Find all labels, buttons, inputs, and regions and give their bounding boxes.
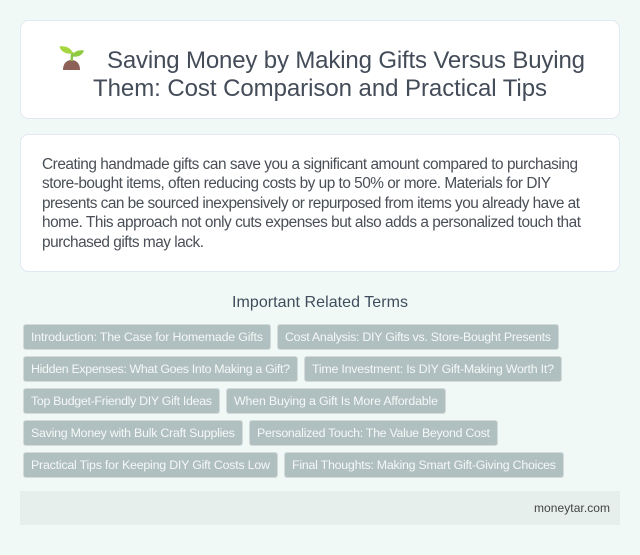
heading: title: Saving Money by Making Gifts Versus Buying	[107, 47, 585, 74]
tag: introduction: Introduction: The Case for Homemade Gifts	[31, 330, 263, 344]
tag: introduction	[24, 324, 270, 350]
tag: time investment: Time Investment: Is DIY Gift-Making Worth It?	[312, 362, 554, 376]
heading: title	[93, 47, 585, 102]
tag: final thoughts: Final Thoughts: Making Smart Gift-Giving Choices	[292, 458, 556, 472]
tag: top ideas: Top Budget-Friendly DIY Gift Ideas	[31, 394, 212, 408]
tag: personalized touch	[250, 420, 498, 446]
footer bar	[20, 491, 620, 525]
tag: final thoughts	[284, 452, 564, 478]
tag: practical tips	[24, 452, 278, 478]
text block: summary	[42, 156, 582, 251]
text block: summary: purchased gifts may lack.	[42, 234, 204, 251]
tag: cost analysis: Cost Analysis: DIY Gifts vs. Store-Bought Presents	[285, 330, 551, 344]
tag: when buying: When Buying a Gift Is More Affordable	[234, 394, 438, 408]
panel: title card	[20, 20, 620, 118]
tag: bulk supplies	[24, 420, 242, 446]
tag list	[24, 324, 564, 478]
tag: when buying	[226, 388, 446, 414]
tag: personalized touch: Personalized Touch: The Value Beyond Cost	[257, 426, 491, 440]
heading: important related terms: Important Related Terms	[232, 294, 408, 311]
tag: top ideas	[24, 388, 220, 414]
text block: summary: store-bought items, often reducing costs by up to 50% or more. Materials for DIY	[42, 175, 551, 192]
text block: summary: Creating handmade gifts can save you a significant amount compared to purchasing	[42, 156, 578, 173]
icon: seedling	[60, 46, 84, 70]
footer text: source: moneytar.com	[534, 501, 610, 515]
text block: summary: presents can be sourced inexpensively or repurposed from items you already have at	[42, 195, 581, 212]
text block: summary: home. This approach not only cuts expenses but also adds a personalized touch that	[42, 214, 582, 231]
tag: time investment	[304, 356, 562, 382]
tag: hidden expenses	[24, 356, 298, 382]
heading: title: Them: Cost Comparison and Practical Tips	[93, 75, 547, 102]
tag: bulk supplies: Saving Money with Bulk Craft Supplies	[31, 426, 235, 440]
panel: summary text	[20, 134, 620, 272]
tag: cost analysis	[278, 324, 558, 350]
tag: practical tips: Practical Tips for Keeping DIY Gift Costs Low	[31, 458, 270, 472]
tag: hidden expenses: Hidden Expenses: What Goes Into Making a Gift?	[31, 362, 290, 376]
